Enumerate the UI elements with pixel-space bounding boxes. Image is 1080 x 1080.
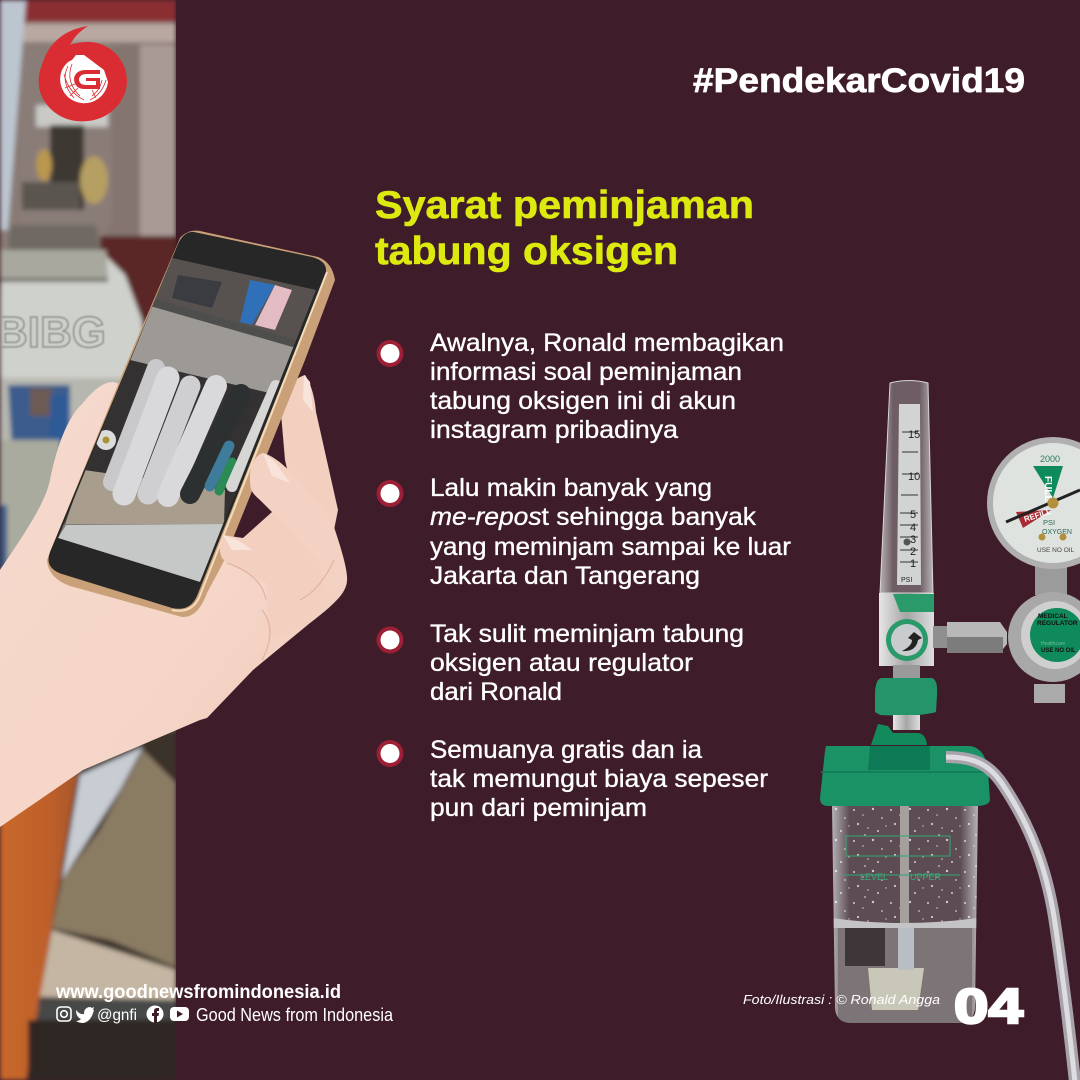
pressure gauge: USE NO OIL (1037, 547, 1075, 554)
oxygen tube (946, 757, 1075, 1080)
bullet item 1: tabung oksigen ini di akun (430, 387, 736, 415)
humidifier jar (832, 806, 978, 1023)
illustration: hand holding phone (0, 231, 347, 827)
page name: Good News from Indonesia (196, 1005, 394, 1025)
bullet item 3: oksigen atau regulator (430, 649, 693, 677)
pressure gauge: 2000 (1040, 454, 1060, 464)
pressure gauge: FULL (1042, 476, 1053, 502)
logo: GNFI red speech mark (39, 26, 127, 121)
photo credit: Foto/Ilustrasi : © Ronald Angga (743, 992, 940, 1007)
flowmeter tube: 15 (908, 429, 920, 441)
flowmeter tube: 2 (910, 546, 916, 558)
bullet item 3: Tak sulit meminjam tabung (430, 620, 744, 648)
flow knob (886, 619, 928, 661)
middle finger (250, 453, 347, 610)
handle: @gnfi (97, 1007, 137, 1024)
bullet item 2: Jakarta dan Tangerang (430, 562, 700, 590)
humidifier jar: UPPER (910, 872, 942, 882)
medical regulator dial (1008, 592, 1080, 703)
bullet item 4 (376, 736, 768, 822)
bullet item 3: dari Ronald (430, 678, 562, 706)
pressure gauge: REFILL (1023, 507, 1052, 524)
phone screen (48, 232, 326, 609)
flowmeter tube: 4 (910, 522, 916, 534)
bullet item 4: pun dari peminjam (430, 794, 647, 822)
pressure gauge: OXYGEN (1042, 529, 1072, 536)
bullet item 2: me-repost sehingga banyak (430, 503, 757, 531)
medical regulator dial: Healthcare (1041, 641, 1065, 647)
page number: 04 (954, 980, 1023, 1034)
green collar (875, 678, 937, 716)
flowmeter body (879, 593, 934, 666)
bullet item 3 (376, 620, 744, 706)
social media row (57, 1005, 394, 1025)
heading: Syarat peminjaman (375, 184, 754, 227)
phone photo of oxygen cylinders (58, 258, 316, 582)
bullet item 2: yang meminjam sampai ke luar (430, 533, 791, 561)
finger nails (223, 375, 313, 550)
bullet item 1: informasi soal peminjaman (430, 358, 742, 386)
panel: blurred photo of oxygen tank (0, 0, 176, 1080)
heading (375, 184, 754, 273)
flowmeter tube: 5 (910, 509, 916, 521)
medical regulator dial: USE NO OIL (1041, 648, 1076, 654)
medical regulator dial: MEDICAL (1038, 613, 1068, 620)
bullet item 1 (376, 329, 784, 444)
icon: instagram (57, 1007, 71, 1021)
flowmeter tube (880, 380, 933, 593)
phone rim highlight (172, 272, 327, 611)
heading: tabung oksigen (375, 230, 678, 273)
website url: www.goodnewsfromindonesia.id (55, 982, 341, 1003)
bullet item 2 (376, 474, 791, 590)
icon: twitter (76, 1007, 94, 1023)
medical regulator dial: REGULATOR (1037, 620, 1078, 627)
pressure gauge: PSI (1043, 518, 1055, 527)
hand palm and thumb (0, 382, 347, 827)
pressure gauge (987, 437, 1080, 595)
icon: facebook (146, 1006, 164, 1023)
bullet item 4: Semuanya gratis dan ia (430, 736, 702, 764)
hashtag: #PendekarCovid19 (693, 62, 1025, 100)
finger crease shadow (227, 560, 334, 660)
flowmeter tube: 1 (910, 558, 916, 570)
illustration: oxygen regulator with humidifier (820, 380, 1080, 1080)
index finger (280, 375, 338, 530)
humidifier lid (820, 724, 990, 806)
bullet item 1: instagram pribadinya (430, 416, 678, 444)
humidifier jar: LEVEL (860, 872, 888, 882)
ring finger (220, 512, 328, 640)
bullet item 2: Lalu makin banyak yang (430, 474, 712, 502)
bullet item 1: Awalnya, Ronald membagikan (430, 329, 784, 357)
flowmeter tube: 3 (910, 534, 916, 546)
phone gold casing (47, 231, 335, 617)
flowmeter tube: PSI (901, 577, 912, 584)
connector (933, 622, 1007, 653)
flowmeter tube: 10 (908, 471, 920, 483)
icon: youtube (170, 1007, 189, 1021)
bullet item 4: tak memungut biaya sepeser (430, 765, 768, 793)
